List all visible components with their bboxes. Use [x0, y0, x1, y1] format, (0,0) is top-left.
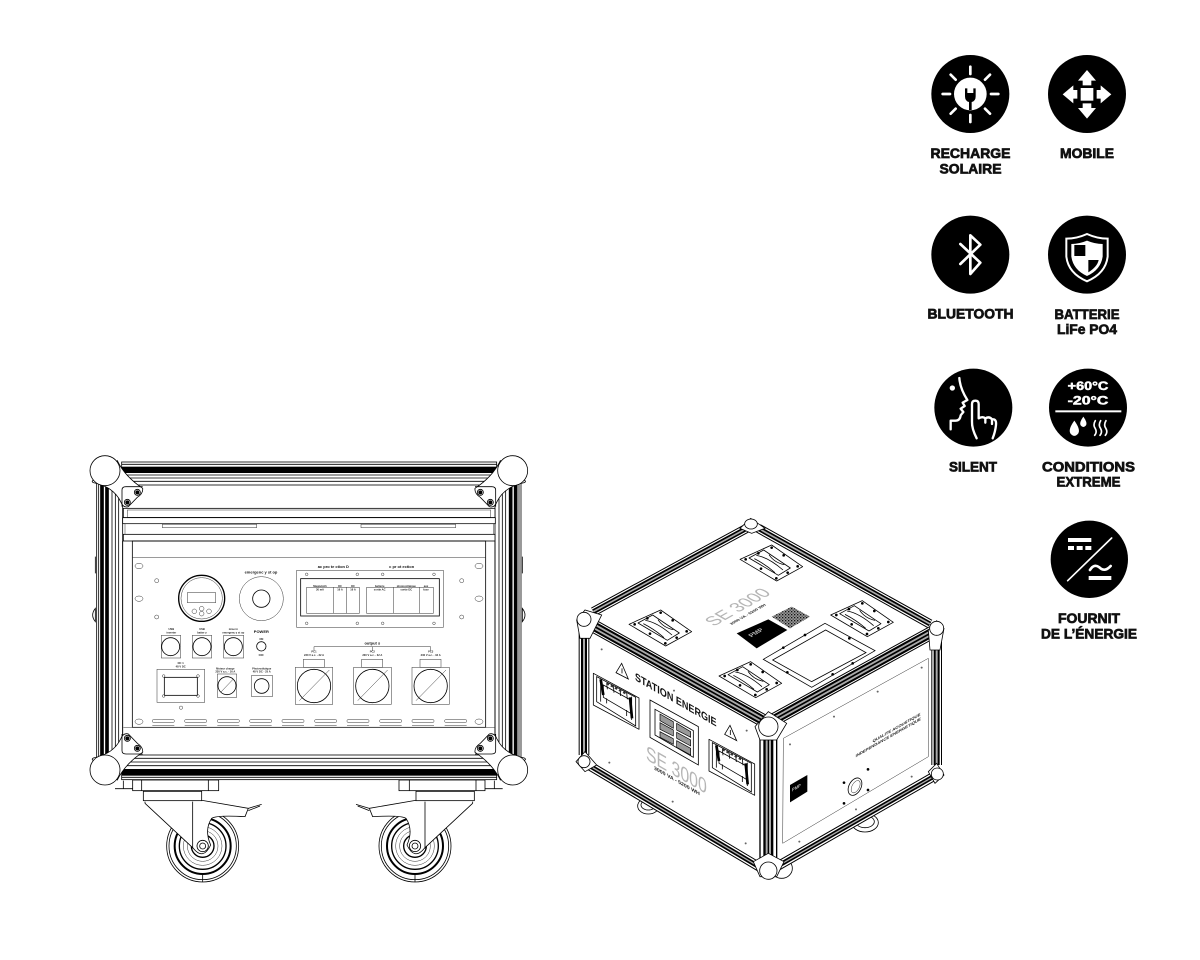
logo on top: PMP	[747, 627, 766, 638]
photovoltaic socket: Photovoltaïque	[252, 666, 272, 670]
protection breakers: DC	[338, 584, 342, 588]
control panel	[123, 541, 495, 727]
power switch: ON	[259, 637, 263, 641]
case faces	[585, 525, 937, 875]
outputs	[295, 640, 449, 704]
logo on top	[737, 619, 787, 648]
label: batterie: BATTERIE	[1054, 306, 1120, 322]
outputs: 230 V a.c. - 32 A	[304, 653, 324, 657]
top inner frame	[123, 508, 495, 755]
icon: mobile	[1048, 55, 1126, 133]
side text: QUALITE ACOUSTIQUE	[873, 711, 921, 744]
icon: bluetooth	[931, 216, 1009, 294]
left caster wheel	[115, 780, 262, 882]
protection breakers: 30 mA	[316, 588, 324, 592]
isometric view of flight case	[576, 518, 944, 879]
label: fournit de l'energie: FOURNIT	[1058, 610, 1120, 626]
right handle on left face	[709, 739, 755, 795]
emergency stop: emergenc y st op	[245, 570, 278, 575]
small connectors: USB	[169, 627, 174, 631]
ventilation slots	[152, 720, 467, 725]
label: conditions extreme: CONDITIONS	[1042, 458, 1135, 474]
DC socket	[157, 661, 205, 702]
protection breakers: ac pro te ction D	[318, 564, 349, 569]
label: batterie	[1054, 306, 1120, 337]
top rail	[122, 462, 497, 485]
protection breakers	[297, 564, 443, 627]
handle top left	[629, 610, 692, 646]
left face handle	[593, 673, 639, 729]
side latches	[93, 557, 525, 622]
small connectors: batter y	[197, 630, 207, 634]
DC socket: DC 1	[178, 661, 184, 665]
DC socket: 48 V DC	[176, 664, 186, 668]
bottom rail	[122, 755, 497, 780]
label: conditions extreme	[1042, 458, 1135, 490]
protection breakers: sortie AC	[374, 588, 386, 592]
label: recharge solaire	[930, 145, 1010, 176]
label: batterie: LiFe PO4	[1057, 321, 1117, 337]
corner top right	[475, 456, 528, 507]
engine charge socket: 230 V a.c. - 16 A	[215, 669, 235, 673]
photovoltaic socket: 48 V DC - 25 A	[253, 669, 271, 673]
QR code	[772, 607, 810, 628]
protection breakers: aux	[424, 585, 429, 588]
label: silent: SILENT	[949, 458, 997, 474]
protection breakers: fuse	[423, 588, 429, 592]
label: recharge solaire: SOLAIRE	[940, 160, 1002, 176]
power spec on top: 3000 VA - 5200 WH	[728, 603, 767, 625]
protection breakers: sortie DC	[400, 588, 412, 592]
side port	[843, 768, 869, 805]
protection breakers: photovoltaïque	[397, 584, 416, 588]
corner bottom left	[90, 734, 143, 785]
protection breakers: 16 A	[350, 588, 356, 592]
side logo	[790, 775, 807, 802]
protection breakers: batterie	[375, 584, 385, 588]
engine charge socket: Moteur charge	[216, 666, 235, 670]
model name on top: SE 3000	[699, 585, 775, 629]
right caster wheel	[356, 780, 503, 882]
side text	[856, 711, 921, 758]
handle top right	[831, 601, 893, 637]
outputs: 230 V a.c. - 32 A	[362, 653, 382, 657]
right rail	[495, 483, 521, 758]
side logo: PMP	[792, 783, 801, 793]
digital meter	[179, 575, 225, 621]
icon: extreme conditions	[1049, 369, 1127, 447]
protection breakers: c pr ot ection	[389, 564, 415, 569]
corner bottom right	[475, 734, 528, 785]
small connectors	[161, 627, 245, 658]
rails	[584, 528, 937, 868]
small connectors: USB	[199, 627, 205, 631]
label: fournit de l'energie	[1041, 610, 1137, 642]
outputs: output s	[364, 640, 381, 645]
outputs: PC2	[370, 650, 375, 654]
power switch: OFF	[259, 653, 264, 657]
iso corner balls	[576, 518, 944, 879]
engine charge socket	[215, 666, 237, 697]
protection breakers: DC	[351, 584, 355, 588]
label: bluetooth: BLUETOOTH	[928, 306, 1014, 322]
small connectors: mise in	[229, 627, 238, 631]
left rail	[97, 483, 123, 758]
power switch	[254, 629, 269, 657]
icons and labels column	[928, 55, 1137, 641]
front view of flight case	[90, 456, 528, 882]
emergency stop	[239, 570, 283, 621]
photovoltaic socket	[252, 666, 272, 697]
icon: silent	[934, 369, 1012, 447]
station energie label: STATION ENERGIE	[635, 671, 717, 730]
icon: battery shield	[1048, 216, 1126, 294]
small connectors: inverter	[166, 630, 176, 634]
warning triangle left	[616, 663, 628, 679]
outputs: PC3	[428, 650, 434, 654]
outputs: PC1	[311, 650, 317, 654]
label: fournit de l'energie: DE L’ÉNERGIE	[1041, 626, 1137, 642]
protection breakers: 16 A	[337, 588, 343, 592]
icon: extreme conditions: -20°C	[1068, 394, 1109, 408]
icon: recharge solaire	[931, 55, 1009, 133]
label: conditions extreme: EXTREME	[1056, 474, 1120, 490]
label: recharge solaire: RECHARGE	[930, 145, 1010, 161]
side text: INDEPENDANCE ENERGETIQUE	[856, 716, 921, 758]
small connectors: emergenc y st op	[222, 630, 245, 634]
power switch: POWER	[254, 629, 269, 634]
label: mobile: MOBILE	[1060, 145, 1114, 161]
protection breakers: Magnétoth	[313, 584, 327, 588]
hidden wheels	[638, 798, 878, 878]
handle top front	[719, 662, 782, 698]
outputs: 230 V a.c. - 32 A	[421, 653, 441, 657]
icon: extreme conditions: +60°C	[1068, 379, 1109, 393]
handle top back	[740, 545, 803, 581]
power spec on side: 3000 VA - 5200 WH	[654, 765, 700, 798]
model name on side: SE 3000	[646, 741, 707, 799]
warning triangle right	[725, 725, 737, 741]
icon: AC DC energy	[1051, 521, 1128, 598]
corner top left	[90, 456, 143, 507]
top window	[763, 623, 875, 687]
vent plate	[650, 700, 698, 765]
